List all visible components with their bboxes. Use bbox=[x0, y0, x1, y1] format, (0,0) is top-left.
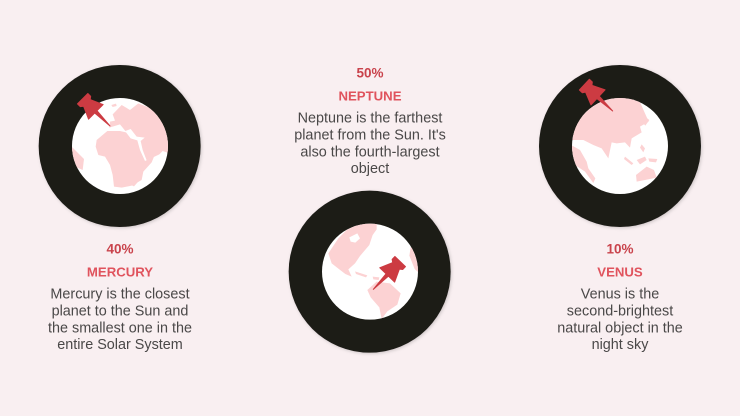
globe ring: Venus bbox=[539, 65, 701, 227]
text block: Mercury: planet to the Sun and bbox=[52, 304, 188, 320]
text block: Venus: natural object in the bbox=[557, 320, 683, 336]
text block: Mercury: Mercury is the closest bbox=[50, 286, 190, 302]
map: Asia and Australia bbox=[570, 97, 657, 183]
text block: Neptune: also the fourth-largest bbox=[300, 144, 440, 160]
text block: Neptune: NEPTUNE bbox=[338, 88, 402, 104]
map: Africa and Europe bbox=[70, 103, 173, 188]
text block: Venus: 10% bbox=[606, 242, 634, 256]
globe ring: Mercury bbox=[39, 65, 201, 227]
icon: push pin bbox=[366, 254, 408, 297]
text block: Neptune: planet from the Sun. It's bbox=[294, 128, 446, 144]
text block: Mercury: 40% bbox=[106, 242, 134, 256]
icon: push pin bbox=[577, 77, 620, 119]
text block: Venus: VENUS bbox=[597, 264, 643, 280]
text block: Neptune: object bbox=[351, 161, 389, 177]
text block: Mercury: entire Solar System bbox=[57, 337, 183, 353]
text block: Neptune: 50% bbox=[356, 66, 384, 80]
text block: Neptune: Neptune is the farthest bbox=[298, 110, 442, 126]
text block: Mercury: the smallest one in the bbox=[48, 320, 192, 336]
text block: Mercury: MERCURY bbox=[87, 264, 153, 280]
text block: Mercury bbox=[48, 242, 192, 353]
map: the Americas bbox=[328, 223, 420, 319]
text block: Venus: Venus is the bbox=[581, 286, 659, 302]
text block: Venus: night sky bbox=[592, 337, 649, 353]
text block: Neptune bbox=[294, 66, 446, 177]
icon: push pin bbox=[75, 91, 117, 133]
text block: Venus bbox=[557, 242, 683, 353]
text block: Venus: second-brightest bbox=[567, 304, 673, 320]
globe ring: Neptune bbox=[289, 191, 451, 353]
